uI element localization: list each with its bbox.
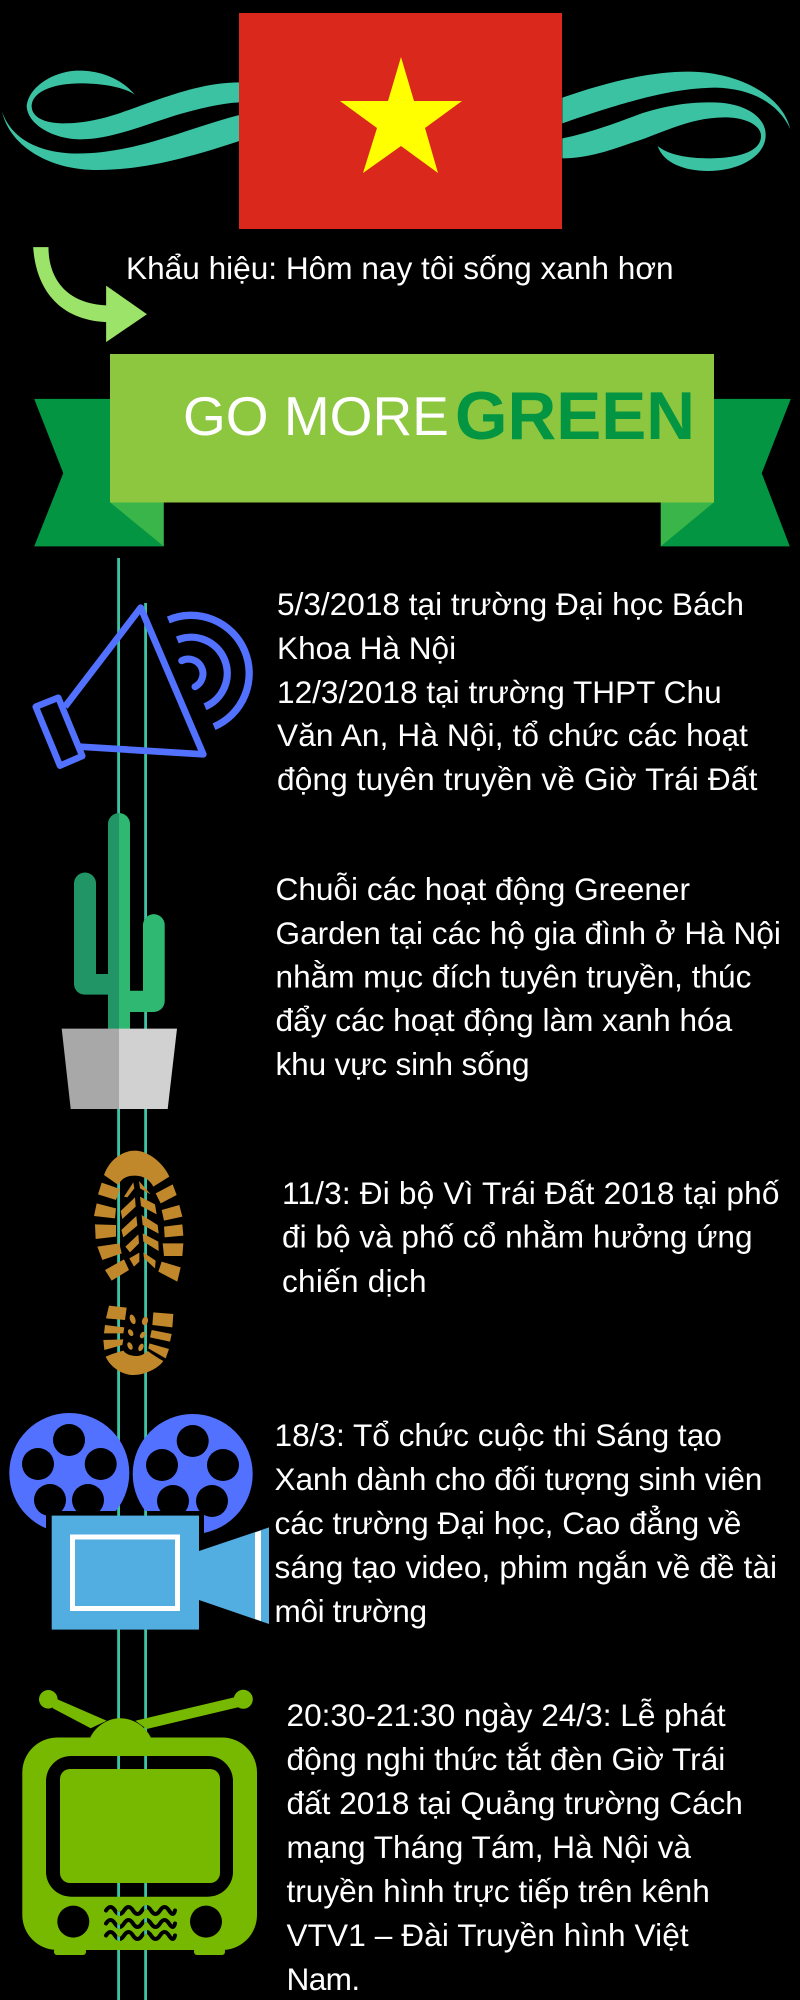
flag star <box>340 57 462 173</box>
text: event block 5: Nam. <box>286 1961 360 1997</box>
large boot print <box>94 1151 183 1282</box>
text: event block 5: đất 2018 tại Quảng trường Cách <box>286 1785 743 1821</box>
icon: boot footprints <box>94 1151 183 1375</box>
text: event block 1: Khoa Hà Nội <box>277 630 456 666</box>
banner main panel <box>110 354 714 502</box>
text: event block 4: sáng tạo video, phim ngắn về đề tài <box>274 1549 777 1585</box>
tv speaker grille <box>104 1905 177 1941</box>
text: event block 4: Xanh dành cho đối tượng sinh viên <box>274 1461 762 1497</box>
tv body <box>22 1738 257 1950</box>
banner left tail <box>34 399 164 546</box>
banner <box>34 354 791 546</box>
left ribbon <box>2 71 239 170</box>
banner word: green: GREEN <box>455 379 695 454</box>
film reels <box>9 1413 253 1534</box>
text: event block 1: 12/3/2018 tại trường THPT Chu <box>277 674 722 710</box>
text: event block 1 <box>277 586 758 797</box>
tv screen <box>60 1769 220 1883</box>
camera viewfinder <box>72 1537 178 1608</box>
text: event block 2: Chuỗi các hoạt động Greener <box>276 871 690 907</box>
icon: television <box>22 1690 257 1955</box>
text: event block 1: 5/3/2018 tại trường Đại học Bách <box>277 586 744 622</box>
text: event block 5: động nghi thức tắt đèn Giờ Trái <box>286 1741 725 1777</box>
text: event block 4 <box>274 1417 777 1629</box>
text: event block 3: đi bộ và phố cổ nhằm hưởng ứng <box>282 1218 753 1254</box>
text: event block 1: động tuyên truyền về Giờ Trái Đất <box>277 761 758 797</box>
text: event block 1: Văn An, Hà Nội, tổ chức các hoạt <box>277 717 748 753</box>
text: event block 5: mạng Tháng Tám, Hà Nội và <box>286 1829 691 1865</box>
banner right tail <box>661 399 791 546</box>
text: event block 2 <box>276 871 781 1082</box>
text: event block 3 <box>282 1175 780 1299</box>
banner words: go more: GO MORE <box>183 385 449 447</box>
text: event block 4: 18/3: Tổ chức cuộc thi Sáng tạo <box>274 1417 722 1453</box>
right ribbon <box>562 72 790 171</box>
text: event block 5: 20:30-21:30 ngày 24/3: Lễ phát <box>286 1697 726 1733</box>
text: event block 5: VTV1 – Đài Truyền hình Việt <box>286 1917 689 1953</box>
text: event block 5 <box>286 1697 743 1997</box>
slogan text: Khẩu hiệu: Hôm nay tôi sống xanh hơn <box>126 250 674 286</box>
text: event block 3: 11/3: Đi bộ Vì Trái Đất 2018 tại phố <box>282 1175 780 1211</box>
tv speakers <box>57 1906 222 1938</box>
icon: film camera <box>9 1413 269 1630</box>
tv feet <box>54 1948 225 1955</box>
camera body <box>52 1516 199 1630</box>
curved arrow <box>33 247 147 342</box>
icon: megaphone <box>36 608 249 766</box>
timeline vertical lines <box>117 558 147 2000</box>
flag of Vietnam <box>239 13 562 229</box>
text: event block 2: khu vực sinh sống <box>276 1046 529 1082</box>
camera lens <box>199 1527 269 1624</box>
text: event block 4: môi trường <box>274 1593 427 1629</box>
text: event block 5: truyền hình trực tiếp trên kênh <box>286 1873 710 1909</box>
small boot print <box>103 1306 173 1375</box>
text: event block 2: Garden tại các hộ gia đình ở Hà Nội <box>276 915 781 951</box>
tv antenna <box>39 1690 253 1738</box>
text: event block 4: các trường Đại học, Cao đẳng về <box>274 1505 741 1541</box>
text: event block 3: chiến dịch <box>282 1263 427 1299</box>
text: event block 2: nhằm mục đích tuyên truyền, thúc <box>276 958 751 994</box>
icon: cactus in pot <box>62 813 177 1109</box>
text: event block 2: đẩy các hoạt động làm xanh hóa <box>276 1002 733 1038</box>
